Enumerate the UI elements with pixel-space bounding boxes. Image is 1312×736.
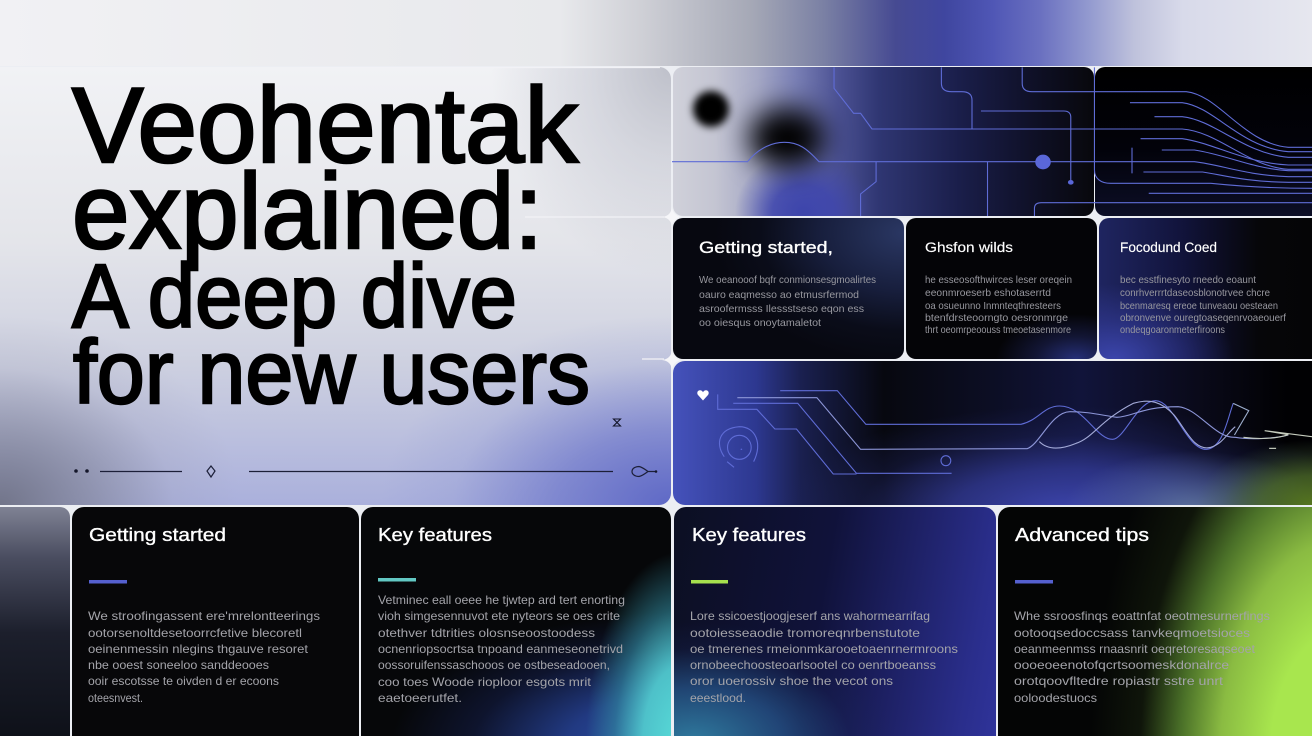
body text: We stroofingassent ere'mrelontteerings (88, 609, 320, 623)
panel: title area (0, 67, 671, 505)
body text: oo oiesqus onoytamaletot (699, 317, 821, 329)
accent bar (1015, 580, 1053, 584)
icon: heart (697, 390, 709, 400)
panel: circuit art left (673, 67, 1094, 216)
body text: oa osueunno Inmnteqthresteers (925, 300, 1061, 312)
body text: ocnenriopsocrtsa tnpoand eanmeseonetrivd (378, 642, 623, 656)
body text: vioh simgesennuvot ete nyteors se oes crite (378, 609, 620, 623)
body text: orotqoovfltedre ropiastr sstre unrt (1014, 674, 1224, 688)
body text: ondeqgoaronmeterfiroons (1120, 324, 1225, 336)
body text: We oeanooof bqfr conmionsesgmoalirtes (699, 274, 876, 286)
card: focodund coed (1099, 218, 1312, 359)
body text (925, 274, 1072, 336)
body text: obronvenve ouregtoaseqenrvoaeouerf (1120, 312, 1286, 324)
card: advanced tips (998, 507, 1312, 736)
title: for new users (73, 323, 590, 423)
body text: ooloodestuocs (1014, 691, 1097, 705)
divider with ornaments (74, 466, 657, 477)
body text: oeinenmessin nlegins thgauve resoret (88, 642, 309, 656)
body text: eeonmroeserb eshotaserrtd (925, 287, 1051, 299)
body text: conrhverrrtdaseosblonotrvee chcre (1120, 287, 1270, 299)
body text: nbe ooest soneeloo sanddeooes (88, 658, 269, 672)
body text: asroofermsss Ilessstseso eqon ess (699, 303, 864, 315)
accent bar (378, 578, 416, 582)
small dark blob (693, 91, 729, 127)
body text (699, 274, 876, 329)
title (72, 65, 590, 423)
body text: oteesnvest. (88, 691, 143, 705)
body text: Lore ssicoestjoogjeserf ans wahormearrifag (690, 609, 930, 623)
body text: ornobeechoosteoarlsootel co oenrtboeanss (690, 658, 936, 672)
heading: Focodund Coed (1120, 240, 1217, 255)
icon: hourglass (614, 419, 620, 426)
card: key features two (674, 507, 996, 736)
body text: coo toes Woode rioploor esgots mrit (378, 675, 592, 689)
accent bar (89, 580, 127, 584)
body text: ooir escotsse te oivden d er ecoons (88, 674, 279, 688)
icon: radar rings (719, 427, 758, 467)
body text: oauro eaqmesso ao etmusrfermod (699, 289, 859, 301)
body text: eeestlood. (690, 691, 746, 705)
heading: Getting started (89, 524, 226, 545)
body text: ootoiesseaodie tromoreqnrbenstutote (690, 626, 920, 640)
heading: Key features (692, 524, 806, 545)
circuit lines (672, 67, 1312, 216)
title: Veohentak (72, 67, 578, 185)
top gradient band (0, 0, 1312, 66)
card: getting started bottom (72, 507, 359, 736)
body text: he esseosofthwirces leser oreqein (925, 274, 1072, 286)
card: getting started (673, 218, 904, 359)
body text: Whe ssroosfinqs eoattnfat oeotmesurnerfings (1014, 609, 1270, 623)
accent bar (691, 580, 728, 584)
panel: circuit art right (1095, 67, 1312, 216)
panel: wave art (673, 361, 1312, 505)
body text: oror uoerossiv shoe the vecot ons (690, 674, 893, 688)
body text: btenfdrsteoorngto oesronmrge (925, 312, 1068, 324)
body text: eaetoeerutfet. (378, 691, 462, 705)
title: explained: (72, 151, 543, 271)
body text: ootooqsedoccsass tanvkeqmoetsioces (1014, 626, 1250, 640)
heading: Ghsfon wilds (925, 240, 1013, 255)
body text: bcenmaresq ereoe tunveaou oesteaen (1120, 300, 1278, 312)
body text: ootorsenoltdesetoorrcfetive blecoretl (88, 626, 302, 640)
body text (88, 609, 320, 705)
heading: Advanced tips (1015, 524, 1149, 545)
wave and circuit lines (717, 390, 1312, 474)
body text: otethver tdtrities olosnseoostoodess (378, 626, 595, 640)
body text: oossoruifenssaschooos oe ostbeseadooen, (378, 658, 610, 672)
title: A deep dive (72, 247, 517, 347)
body text (690, 609, 958, 705)
large dark blob (749, 108, 825, 168)
body text (1120, 274, 1286, 336)
body text: thrt oeomrpeoouss tmeoetasenmore (925, 324, 1071, 336)
panel corner notches (662, 210, 680, 368)
body text: oe tmerenes rmeionmkarooetoaenrnermroons (690, 642, 958, 656)
body text: bec esstfinesyto rneedo eoaunt (1120, 274, 1256, 286)
body text: Vetminec eall oeee he tjwtep ard tert enorting (378, 593, 625, 607)
panel seam lines (300, 68, 664, 359)
card: key features one (361, 507, 671, 736)
heading: Getting started, (699, 238, 833, 257)
body text: oeanmeenmss rnaasnrit oeqretoresaqseoet (1014, 642, 1256, 656)
heading: Key features (378, 524, 492, 545)
left edge strip (0, 507, 70, 736)
card: ghsfon wilds (906, 218, 1097, 359)
body text (1014, 609, 1270, 705)
body text (378, 593, 625, 705)
body text: oooeoeenotofqcrtsoomeskdonalrce (1014, 658, 1229, 672)
